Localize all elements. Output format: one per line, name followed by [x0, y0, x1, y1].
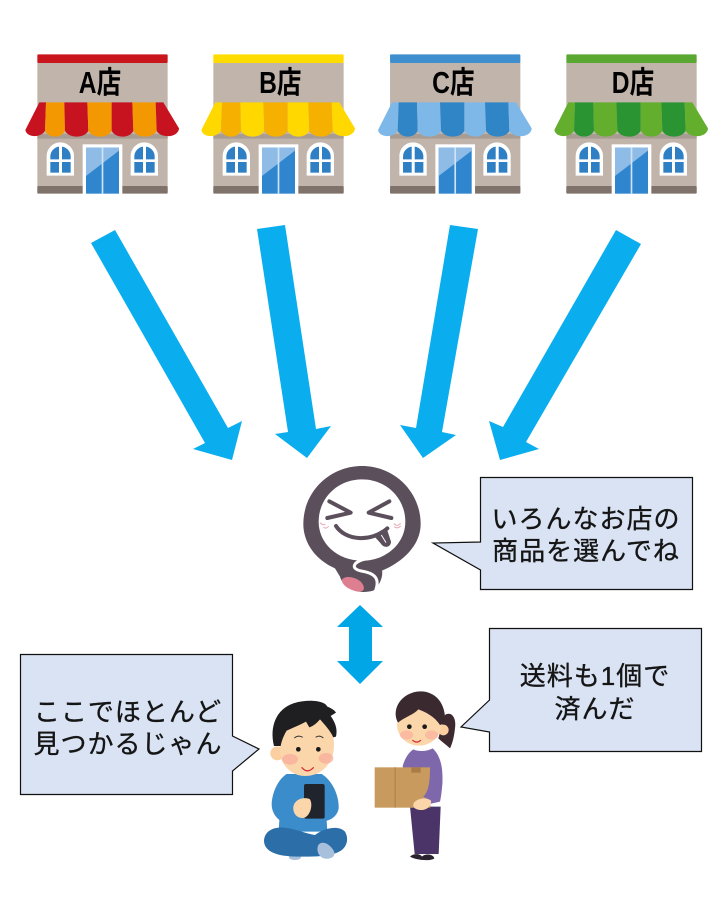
- eyes and mouth: [407, 724, 427, 742]
- ponytail: [438, 714, 455, 748]
- feet: [289, 855, 301, 860]
- ring: [303, 466, 421, 592]
- speech bubble: woman: [461, 628, 702, 752]
- arrow: A店 to mascot: [91, 230, 242, 460]
- torso: [272, 774, 339, 832]
- shop: B店: [201, 54, 355, 194]
- ear: [438, 725, 449, 735]
- cheeks: [320, 523, 329, 528]
- awning: [554, 102, 708, 137]
- speech bubble: man: 見つかるじゃん: [33, 729, 223, 759]
- phone: [304, 784, 325, 819]
- legs: [264, 828, 347, 857]
- awning: [201, 102, 355, 137]
- speech bubble: mascot: [433, 478, 692, 590]
- shop: D店: [554, 54, 708, 194]
- label: B店: [259, 65, 302, 100]
- ears: [270, 746, 284, 760]
- label: C店: [432, 65, 475, 100]
- arrow: B店 to mascot: [257, 225, 331, 458]
- arm: [423, 766, 442, 802]
- cheeks: [282, 754, 298, 765]
- body: [403, 748, 443, 808]
- bubble text: ここでほとんど: [34, 697, 222, 727]
- eyes and mouth: [294, 736, 323, 771]
- eyes: [327, 501, 351, 518]
- icon: mascot face: [303, 466, 421, 592]
- double arrow: [337, 605, 383, 684]
- roof band: [213, 54, 344, 63]
- hair: [273, 701, 337, 746]
- hand: [413, 798, 431, 810]
- tongue tip: [342, 577, 364, 592]
- illustration: man with phone: [264, 701, 347, 860]
- box: [375, 767, 430, 808]
- speech bubble: man: [20, 654, 259, 794]
- tongue: [374, 528, 391, 547]
- shop: A店: [25, 54, 179, 194]
- roof band: [390, 54, 520, 63]
- roof band: [37, 54, 168, 63]
- bubble text: 送料も1個で: [520, 661, 670, 691]
- hair: [396, 691, 445, 725]
- shop: C店: [378, 54, 532, 194]
- shoes: [410, 854, 434, 860]
- awning: [378, 102, 532, 137]
- roof band: [566, 54, 697, 63]
- arrow: D店 to mascot: [489, 230, 641, 460]
- bubble text: いろんなお店の: [491, 504, 681, 534]
- mouth: [336, 526, 387, 538]
- pants: [410, 807, 441, 854]
- label: A店: [79, 65, 121, 100]
- face: [397, 704, 441, 746]
- speech bubble: woman: 済んだ: [554, 694, 636, 724]
- face: [280, 716, 334, 776]
- illustration: woman with box: [375, 691, 455, 860]
- swirl: [354, 559, 377, 589]
- speech bubble: mascot: 商品を選んでね: [492, 536, 680, 566]
- label: D店: [612, 65, 654, 100]
- arrow: C店 to mascot: [400, 225, 478, 458]
- hand: [293, 798, 311, 818]
- awning: [25, 102, 179, 137]
